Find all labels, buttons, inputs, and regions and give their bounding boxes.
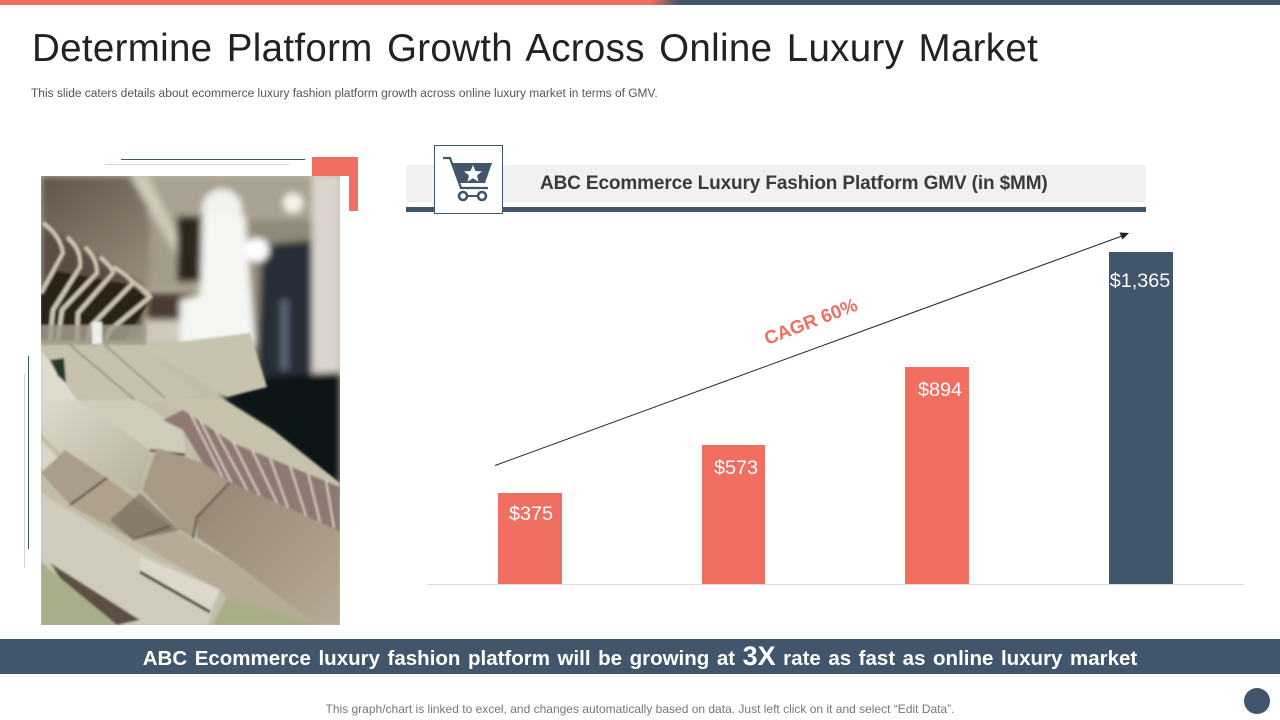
panel: chart header <box>406 145 1146 214</box>
CAGR label: CAGR 60% <box>761 294 861 349</box>
hanger bodies <box>41 345 200 400</box>
bar chart <box>427 232 1244 585</box>
subtitle: This slide caters details about ecommerce luxury fashion platform growth across online luxury market in terms of GMV. <box>31 86 658 100</box>
sweater sleeves <box>197 482 340 625</box>
header background <box>406 165 1146 202</box>
bar: $573 <box>702 445 765 584</box>
front hanger <box>41 493 220 625</box>
top accent lines <box>105 159 305 165</box>
striped garment <box>163 410 340 532</box>
icon: shopping cart with star <box>434 145 503 214</box>
bar: $375 <box>498 493 562 584</box>
arrow: growth trend <box>495 232 1129 466</box>
hanger tops <box>41 270 150 340</box>
callout banner <box>0 639 1280 674</box>
bar: $573: $573 <box>714 457 758 479</box>
chart title: ABC Ecommerce Luxury Fashion Platform GMV (in $MM) <box>540 173 1048 194</box>
left accent lines <box>24 356 29 568</box>
photo: clothes on hangers <box>41 176 340 625</box>
title: Determine Platform Growth Across Online Luxury Market <box>32 27 1038 70</box>
bar: $1,365 <box>1109 252 1173 584</box>
bar: $1,365: $1,365 <box>1110 270 1170 292</box>
panel: photo with decorative frame <box>24 157 358 625</box>
bar: $894 <box>905 367 969 584</box>
bar: $894: $894 <box>918 379 962 401</box>
top accent bar <box>0 0 1280 5</box>
baseline <box>427 584 1244 586</box>
footer note: This graph/chart is linked to excel, and changes automatically based on data. Just left click on it and select “Edit Data”. <box>326 702 954 716</box>
bar: $375: $375 <box>509 503 553 525</box>
header underline <box>406 207 1146 212</box>
green foreground <box>41 563 117 625</box>
coral corner bracket <box>312 157 358 211</box>
callout text: ABC Ecommerce luxury fashion platform will be growing at 3X rate as fast as online luxury market <box>143 641 1137 671</box>
page marker dot <box>1244 688 1270 714</box>
